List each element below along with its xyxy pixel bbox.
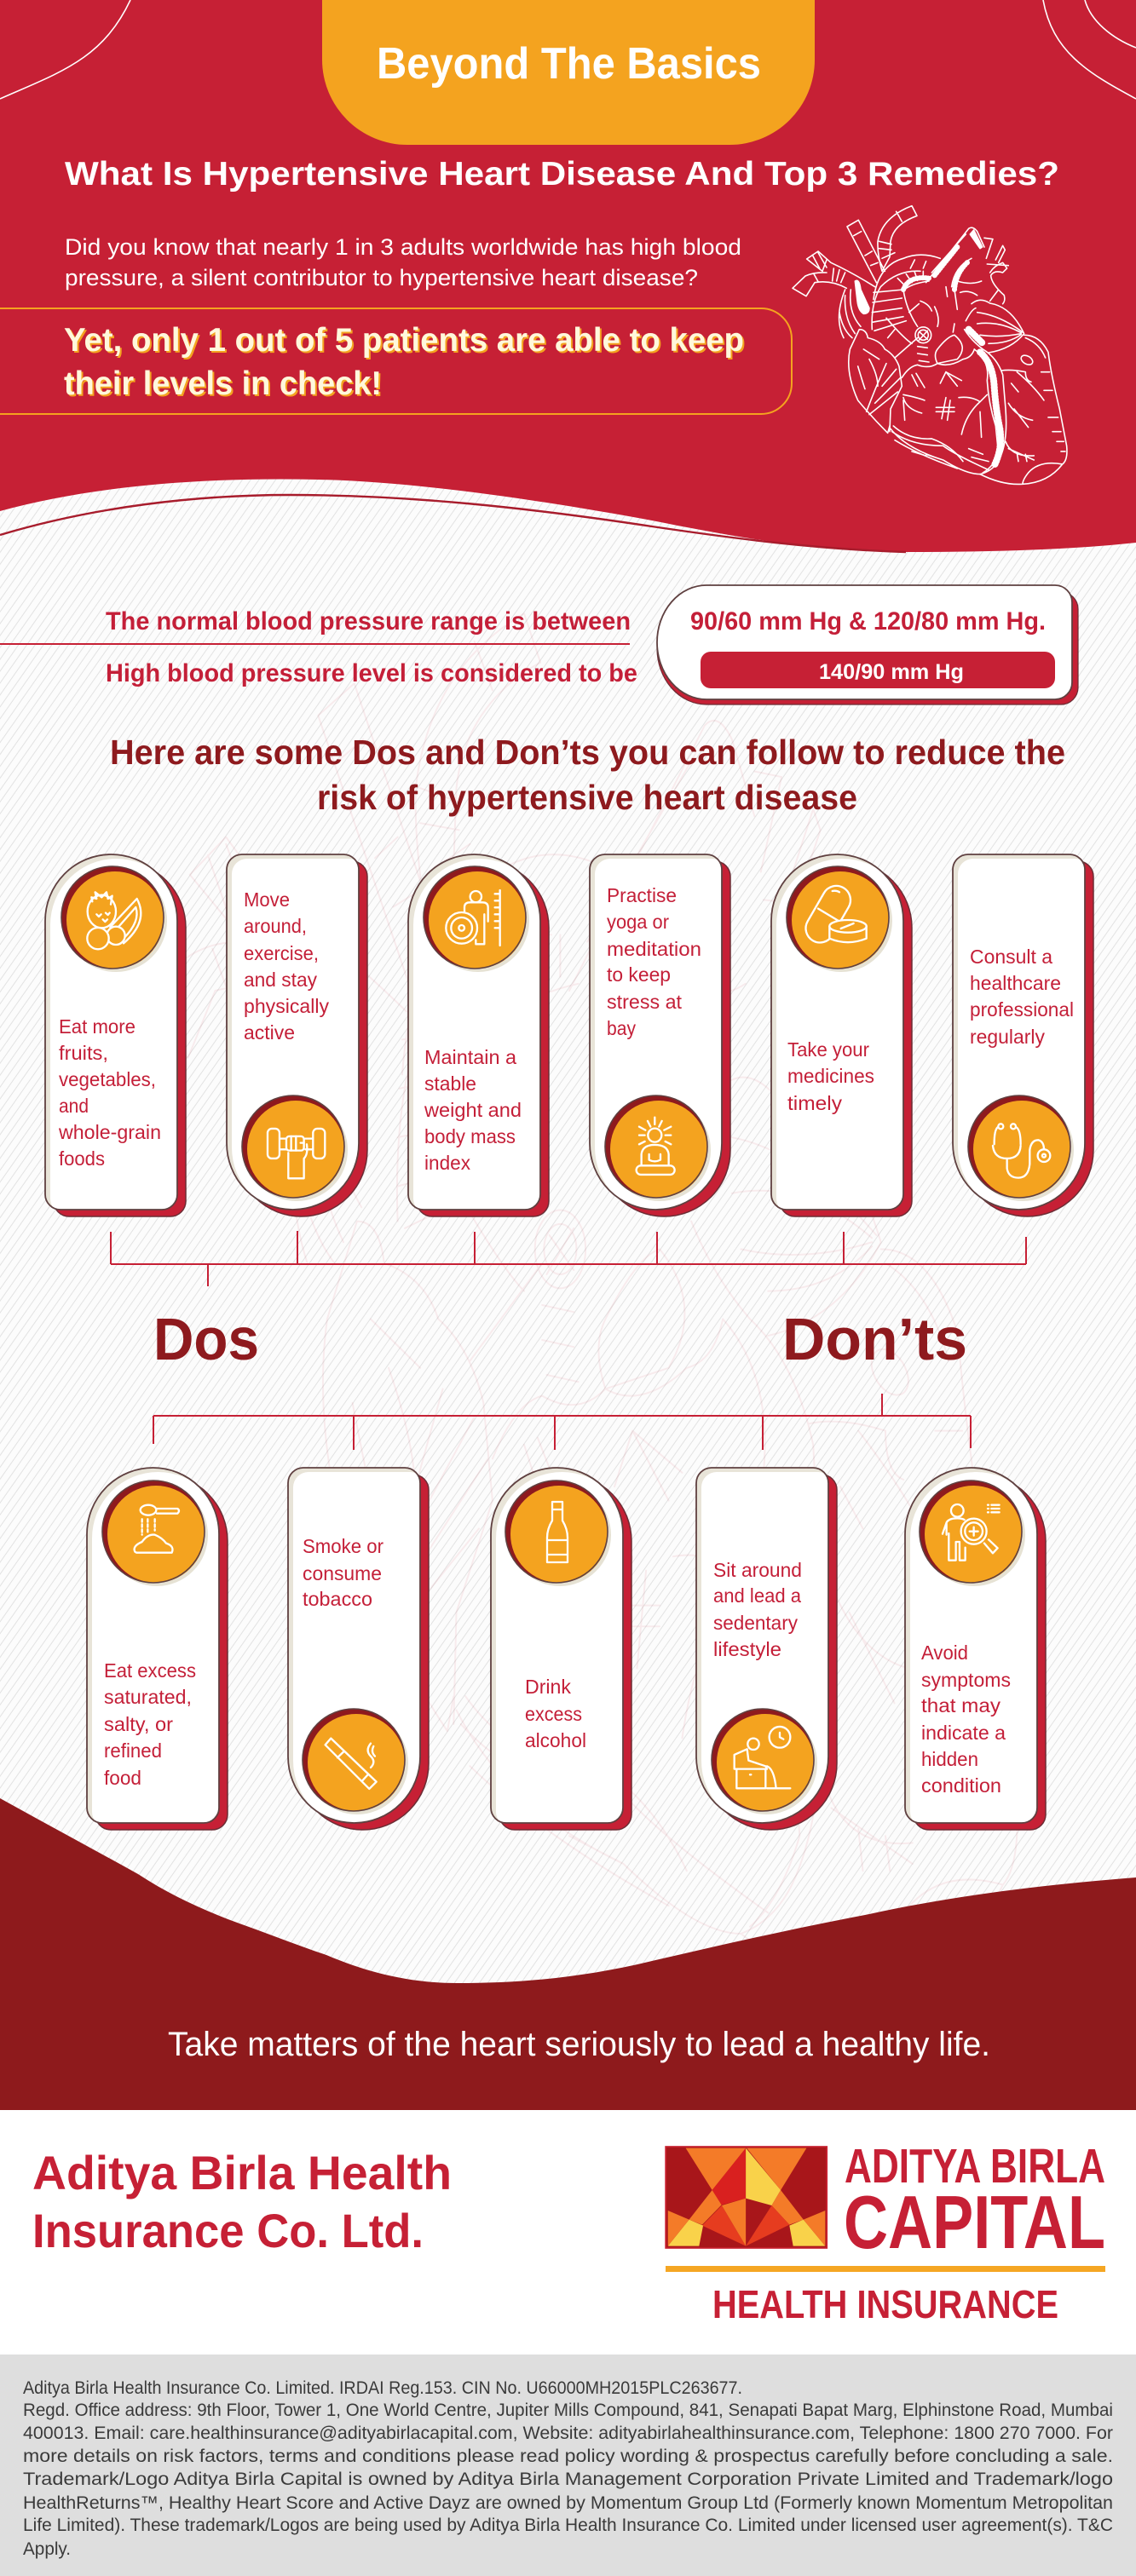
icon: stethoscope bbox=[968, 1095, 1074, 1201]
panel: blood pressure values: 90/60 mm Hg & 120/80 mm Hg. bbox=[690, 607, 1046, 635]
heading: main question: What Is Hypertensive Heart Disease And Top 3 Remedies? bbox=[65, 156, 1059, 193]
text: excess salty food: saturated, bbox=[104, 1686, 192, 1708]
heading: Don'ts: Don’ts bbox=[782, 1306, 967, 1372]
text: avoid symptoms: Avoid bbox=[921, 1642, 968, 1664]
panel: disclaimer: Life Limited). These trademark/Logos are being used by Aditya Birla Health Insurance Co. Limited under licensed user agreement(s). T&C bbox=[23, 2516, 1113, 2535]
text: consult professional: professional bbox=[970, 998, 1074, 1021]
header panel: red wave bbox=[0, 0, 1136, 552]
text: sedentary lifestyle: sedentary bbox=[713, 1612, 798, 1634]
text: drink alcohol: Drink bbox=[525, 1676, 572, 1698]
closing message: Take matters of the heart seriously to lead a healthy life. bbox=[168, 2026, 990, 2063]
panel: company band bbox=[0, 2110, 1136, 2355]
text: take medicines bbox=[787, 1038, 874, 1114]
text: maintain weight: stable bbox=[424, 1072, 476, 1095]
text: take medicines: Take your bbox=[787, 1038, 869, 1061]
text: excess salty food bbox=[104, 1659, 196, 1789]
panel: blood pressure values bbox=[657, 585, 1078, 704]
card: drink alcohol bbox=[491, 1468, 631, 1830]
company name bbox=[32, 2146, 452, 2257]
company name: Aditya Birla Health bbox=[32, 2146, 452, 2199]
icon: fruits bbox=[61, 866, 167, 972]
text: avoid symptoms: indicate a bbox=[921, 1722, 1006, 1744]
text: avoid symptoms: symptoms bbox=[921, 1669, 1011, 1691]
title tab: Beyond The Basics: Beyond The Basics bbox=[377, 39, 761, 89]
text: move around: exercise, bbox=[244, 942, 319, 964]
text: eat more fruits: vegetables, bbox=[59, 1068, 156, 1090]
text: eat more fruits: whole-grain bbox=[58, 1121, 161, 1143]
panel: disclaimer: 400013. Email: care.healthinsurance@adityabirlacapital.com, Website: adityabirlahealthinsurance.com, Telephone: 1800 270 7000. For bbox=[23, 2424, 1113, 2443]
text: consult professional: regularly bbox=[970, 1026, 1045, 1048]
connector: don'ts bbox=[153, 1394, 971, 1450]
text: eat more fruits: fruits, bbox=[59, 1042, 108, 1064]
card: excess salty food bbox=[87, 1468, 228, 1830]
connector: dos bbox=[111, 1231, 1026, 1286]
text: move around: and stay bbox=[244, 969, 317, 991]
text: smoke tobacco: consume bbox=[303, 1562, 382, 1584]
text: take medicines: medicines bbox=[787, 1065, 874, 1087]
text: move around: physically bbox=[244, 995, 329, 1017]
decorative corner curves bbox=[0, 0, 1136, 99]
company name: Insurance Co. Ltd. bbox=[32, 2204, 424, 2257]
text: smoke tobacco: Smoke or bbox=[303, 1535, 383, 1557]
text: maintain weight: weight and bbox=[424, 1099, 522, 1121]
text: excess salty food: Eat excess bbox=[104, 1659, 196, 1682]
card: move around bbox=[227, 854, 367, 1216]
text: sedentary lifestyle bbox=[713, 1559, 802, 1660]
card: consult professional bbox=[953, 854, 1093, 1216]
text: sedentary lifestyle: lifestyle bbox=[713, 1638, 781, 1660]
text: maintain weight: body mass bbox=[424, 1125, 516, 1147]
watermark: large faint heart bbox=[145, 613, 1018, 1983]
text: take medicines: timely bbox=[787, 1092, 843, 1114]
text: avoid symptoms: condition bbox=[921, 1774, 1001, 1797]
logo rule bbox=[666, 2266, 1105, 2272]
icon: bottle bbox=[505, 1481, 611, 1586]
text: smoke tobacco: tobacco bbox=[303, 1588, 372, 1610]
text: maintain weight: Maintain a bbox=[424, 1046, 516, 1068]
callout: 1 out of 5 patients bbox=[0, 308, 792, 414]
text: move around: around, bbox=[244, 915, 307, 937]
text block: intro: Did you know that nearly 1 in 3 adults worldwide has high blood bbox=[65, 234, 741, 260]
text block: blood pressure labels: High blood pressure level is considered to be bbox=[106, 659, 637, 687]
text: practise yoga: yoga or bbox=[607, 911, 669, 933]
icon: person sitting with clock bbox=[712, 1709, 817, 1814]
text: maintain weight: index bbox=[424, 1152, 470, 1174]
icon: anatomical heart bbox=[793, 206, 1067, 484]
text block: blood pressure labels bbox=[0, 607, 637, 687]
icon: pills bbox=[787, 866, 892, 972]
text: eat more fruits bbox=[58, 1015, 161, 1170]
text: eat more fruits: and bbox=[59, 1095, 89, 1117]
text: maintain weight bbox=[424, 1046, 522, 1174]
card: sedentary lifestyle bbox=[696, 1468, 837, 1830]
footer band: dark red wave bbox=[0, 1798, 1136, 2110]
text: eat more fruits: Eat more bbox=[59, 1015, 136, 1038]
text: eat more fruits: foods bbox=[59, 1147, 105, 1170]
callout: 1 out of 5 patients: Yet, only 1 out of 5 patients are able to keep bbox=[64, 322, 744, 359]
icon: salt spoon bbox=[102, 1481, 208, 1586]
background: hatched white panel bbox=[0, 460, 1136, 2121]
text: excess salty food: refined bbox=[104, 1739, 162, 1762]
text block: intro bbox=[65, 234, 741, 290]
callout: 1 out of 5 patients: their levels in check! bbox=[64, 365, 382, 402]
panel: disclaimer: Trademark/Logo Aditya Birla Capital is owned by Aditya Birla Management Corporation Private Limited and Trademark/logo bbox=[23, 2470, 1113, 2489]
icon: person with magnifier bbox=[920, 1481, 1025, 1586]
text: practise yoga: meditation bbox=[607, 938, 701, 960]
text: consult professional: healthcare bbox=[970, 972, 1061, 994]
text: move around: Move bbox=[244, 888, 290, 911]
text: smoke tobacco bbox=[303, 1535, 383, 1610]
heading: dos and don'ts intro: Here are some Dos and Don’ts you can follow to reduce the bbox=[110, 733, 1065, 772]
text: consult professional: Consult a bbox=[970, 946, 1052, 968]
icon: meditation bbox=[605, 1095, 711, 1201]
text: practise yoga: Practise bbox=[607, 884, 677, 906]
logo wordmark: Health Insurance: HEALTH INSURANCE bbox=[712, 2282, 1058, 2326]
text: sedentary lifestyle: and lead a bbox=[713, 1584, 801, 1607]
panel: disclaimer: Regd. Office address: 9th Floor, Tower 1, One World Centre, Jupiter Mills Compound, 841, Senapati Bapat Marg, Elphinstone Road, Mumbai bbox=[23, 2401, 1113, 2420]
title tab: Beyond The Basics bbox=[322, 0, 815, 145]
text block: intro: pressure, a silent contributor to hypertensive heart disease? bbox=[65, 265, 698, 290]
icon: weighing scale bbox=[424, 866, 529, 972]
text: practise yoga: stress at bbox=[607, 991, 683, 1013]
text: practise yoga: bay bbox=[607, 1017, 636, 1039]
text: practise yoga bbox=[607, 884, 701, 1039]
panel: blood pressure values: 140/90 mm Hg bbox=[819, 660, 964, 684]
card: practise yoga bbox=[590, 854, 730, 1216]
text: consult professional bbox=[970, 946, 1074, 1048]
text: avoid symptoms: that may bbox=[921, 1694, 1001, 1716]
heading: Dos: Dos bbox=[153, 1306, 259, 1372]
text: avoid symptoms bbox=[921, 1642, 1011, 1797]
text: drink alcohol: excess bbox=[525, 1703, 582, 1725]
panel: disclaimer: Aditya Birla Health Insurance Co. Limited. IRDAI Reg.153. CIN No. U66000MH2015PLC263677. bbox=[23, 2378, 742, 2398]
text: move around: active bbox=[244, 1021, 295, 1044]
text: sedentary lifestyle: Sit around bbox=[713, 1559, 802, 1581]
panel: disclaimer: more details on risk factors, terms and conditions please read policy wording & prospectus carefully before concluding a sale. bbox=[23, 2447, 1113, 2466]
text: excess salty food: food bbox=[104, 1767, 141, 1789]
text block: blood pressure labels: The normal blood pressure range is between bbox=[106, 607, 631, 635]
text: drink alcohol bbox=[525, 1676, 586, 1751]
panel: disclaimer bbox=[0, 2355, 1136, 2576]
text: avoid symptoms: hidden bbox=[921, 1748, 978, 1770]
card: eat more fruits bbox=[45, 854, 186, 1216]
panel: disclaimer: HealthReturns™, Healthy Heart Score and Active Dayz are owned by Momentum Group Ltd (Formerly known Momentum Metropolitan bbox=[23, 2493, 1113, 2513]
heading: dos and don'ts intro: risk of hypertensive heart disease bbox=[317, 778, 857, 817]
card: avoid symptoms bbox=[905, 1468, 1046, 1830]
text: practise yoga: to keep bbox=[607, 963, 671, 986]
text: drink alcohol: alcohol bbox=[525, 1729, 586, 1751]
text: excess salty food: salty, or bbox=[104, 1713, 173, 1735]
panel: disclaimer: Apply. bbox=[23, 2539, 71, 2559]
logo: Aditya Birla Capital mark bbox=[666, 2147, 827, 2248]
card: take medicines bbox=[771, 854, 912, 1216]
text: move around bbox=[244, 888, 329, 1044]
heading: dos and don'ts intro bbox=[110, 733, 1065, 817]
card: maintain weight bbox=[408, 854, 549, 1216]
icon: dumbbell bbox=[242, 1095, 348, 1201]
icon: cigarette bbox=[303, 1709, 408, 1814]
card: smoke tobacco bbox=[288, 1468, 429, 1830]
